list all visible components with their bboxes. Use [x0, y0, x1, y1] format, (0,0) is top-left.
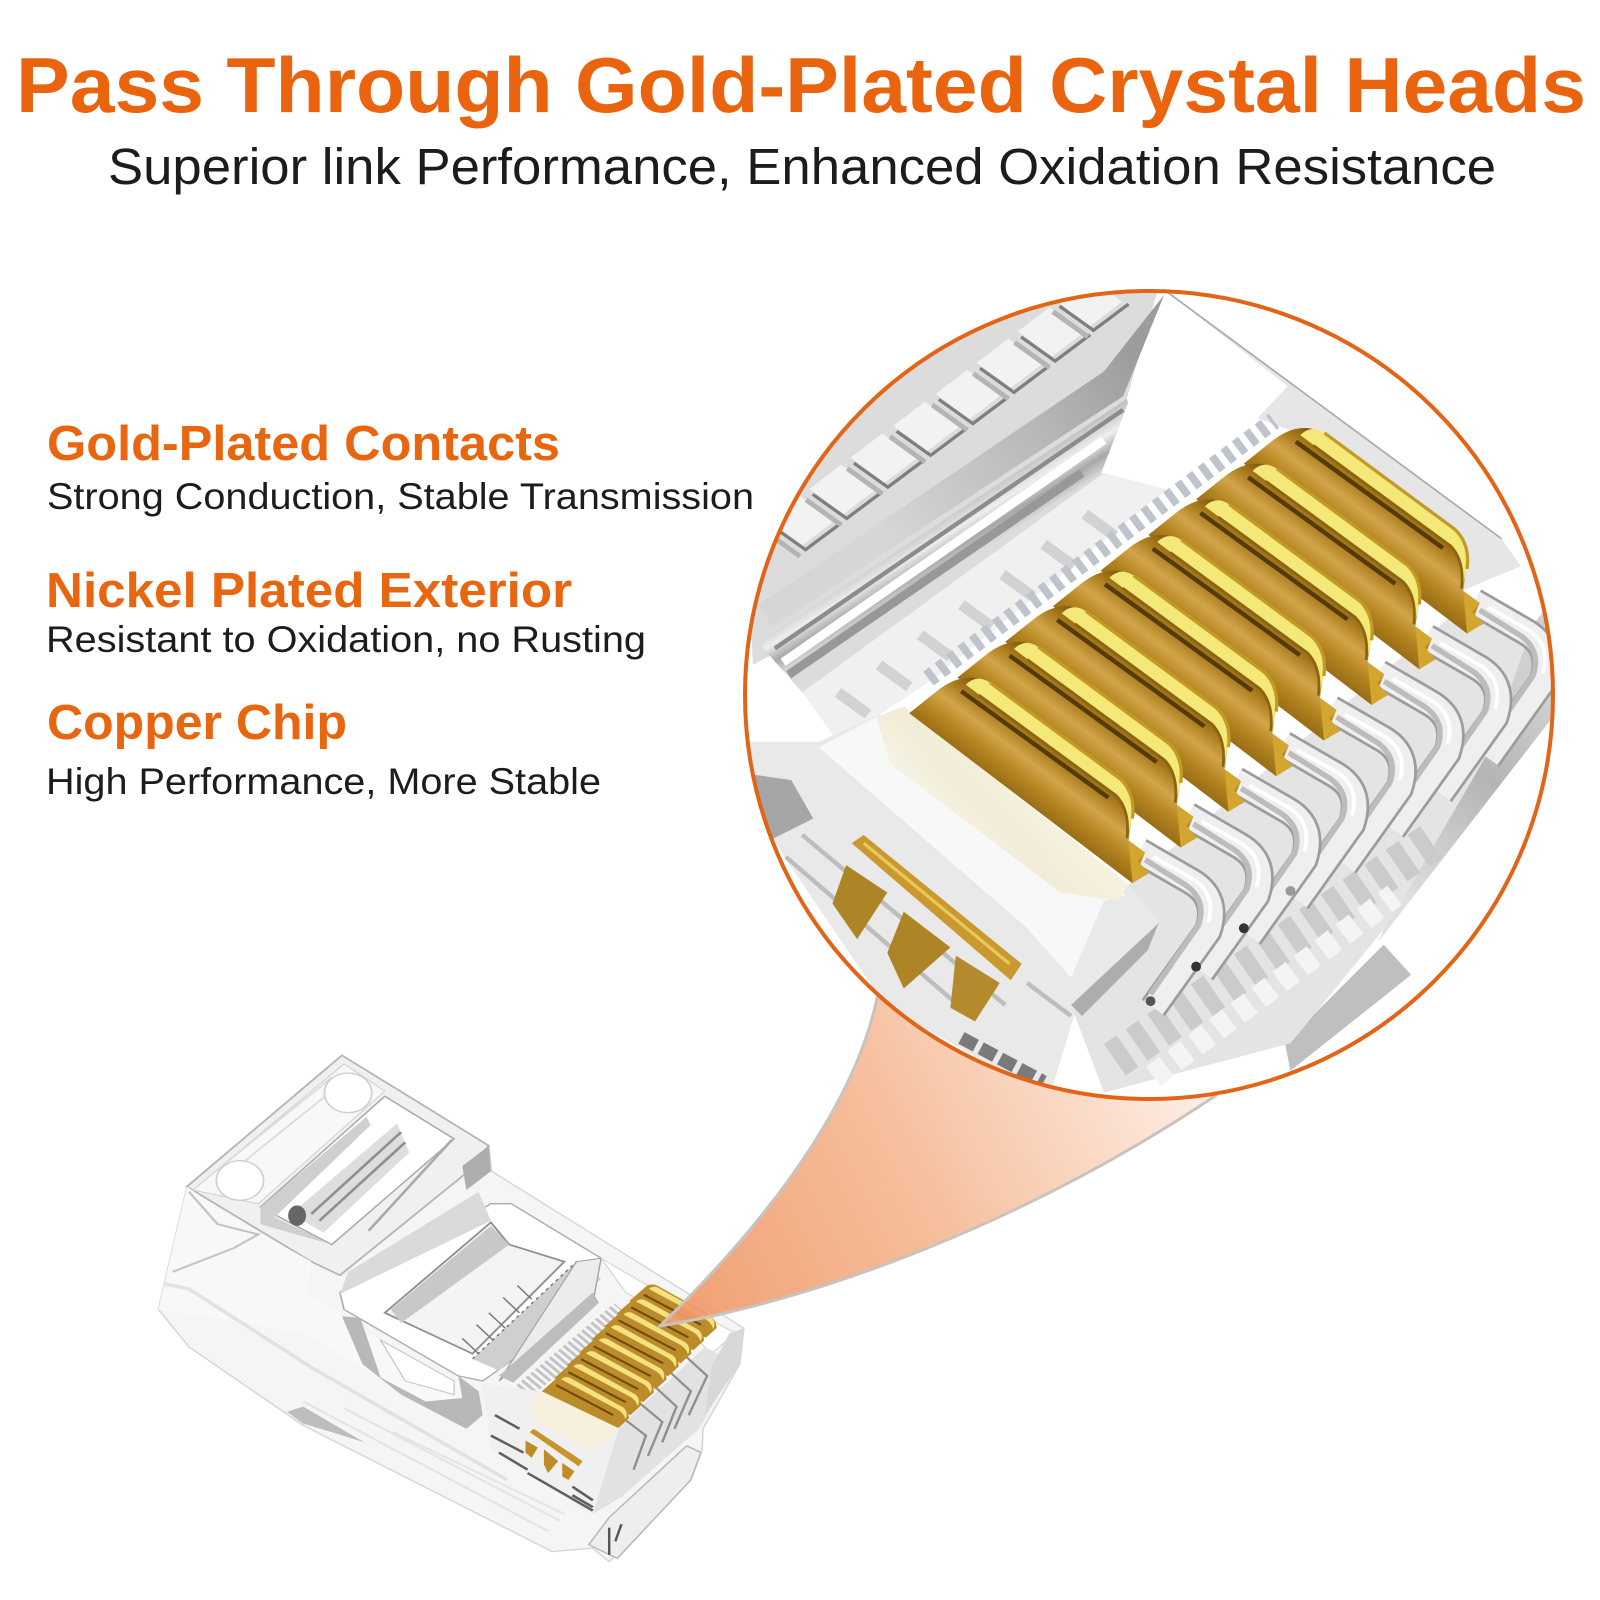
lower teeth — [1115, 840, 1433, 1060]
rear wedge — [890, 294, 1164, 538]
ledge — [802, 473, 1167, 742]
heading: gold-plated contacts: Gold-Plated Contacts — [47, 417, 560, 471]
right greys — [1378, 605, 1559, 942]
front block — [750, 714, 1128, 1086]
teeth row — [928, 421, 1274, 679]
left face — [158, 1187, 466, 1425]
rear ribbed area — [736, 286, 1159, 665]
small copper chip — [530, 1429, 583, 1466]
leg pin holes — [1146, 996, 1156, 1006]
front block — [483, 1384, 621, 1514]
gold contacts — [542, 1284, 717, 1428]
side wedge — [342, 1316, 483, 1429]
text: nickel plated description: Resistant to Oxidation, no Rusting — [46, 619, 646, 660]
circle outline — [745, 291, 1553, 1099]
white window — [1101, 404, 1130, 474]
heading: nickel plated exterior: Nickel Plated Exterior — [46, 564, 572, 618]
text: gold-plated contacts description: Strong Conduction, Stable Transmission — [47, 476, 754, 517]
plastic legs — [593, 1347, 736, 1514]
plastic legs — [1140, 602, 1546, 1008]
rail — [758, 399, 1130, 692]
rib row — [524, 1309, 621, 1391]
middle window — [340, 1204, 601, 1381]
copper chip — [832, 835, 1022, 1021]
connector illustration — [158, 1055, 744, 1562]
top window — [260, 1096, 454, 1245]
top prism — [187, 1055, 489, 1275]
magnified connector — [736, 277, 1559, 1098]
right opening — [601, 1258, 736, 1354]
right wall — [705, 1328, 744, 1415]
subtitle: Superior link Performance, Enhanced Oxidation Resistance — [108, 138, 1496, 195]
top right wall — [1195, 314, 1520, 590]
cream panel — [876, 706, 1129, 901]
heading: copper chip: Copper Chip — [47, 696, 347, 750]
lower right tab — [589, 1446, 701, 1558]
connector body — [158, 1055, 744, 1562]
bottom clip — [287, 1407, 364, 1442]
leg backing — [1071, 599, 1526, 1093]
magnified detail circle — [736, 277, 1559, 1099]
text: copper chip description: High Performance, More Stable — [46, 761, 601, 802]
feature list — [46, 417, 754, 802]
title: Pass Through Gold-Plated Crystal Heads — [16, 41, 1586, 129]
lower body stripes — [303, 1401, 564, 1531]
gold contacts — [909, 428, 1484, 883]
zoom cone — [660, 998, 1215, 1326]
